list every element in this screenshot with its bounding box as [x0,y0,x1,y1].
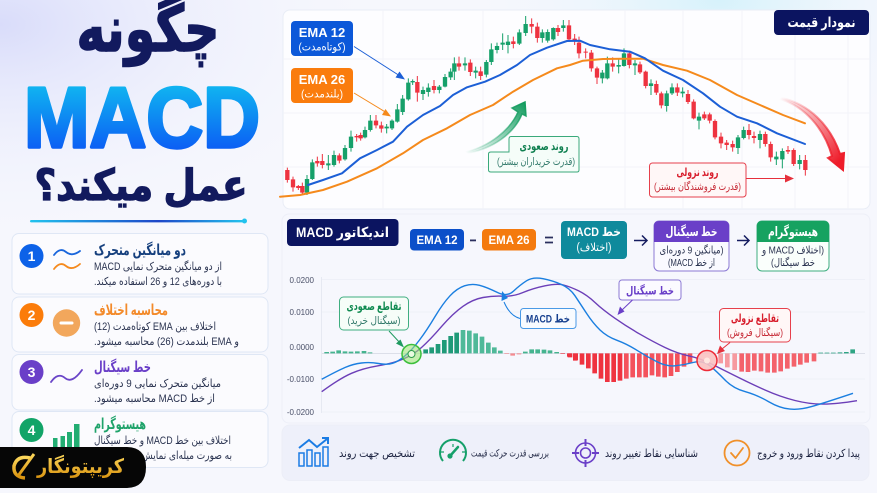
step text [94,377,221,405]
step card 3 [12,354,268,410]
icon: signal line [51,370,82,382]
minus sign [470,240,476,241]
box: MACD line [561,221,627,259]
axis labels: 0.0000 [290,343,315,352]
callout: bullish crossover: (سیگنال خرید) [348,314,400,327]
use: momentum [440,440,549,461]
axis labels: 0.0200 [290,276,315,285]
price label: نمودار قیمت [788,14,856,31]
title [24,0,260,224]
callout: bullish crossover: تقاطع صعودی [346,301,402,314]
arrow: downtrend callout [746,174,794,182]
use: trend change [572,439,698,467]
step text: میانگین متحرک نمایی 9 دوره‌ای [94,377,221,390]
box: MACD line: (اختلاف) [576,242,612,254]
box: histogram: هیستوگرام [768,224,818,240]
arrow: bullish crossover [389,331,404,348]
callout: bearish crossover: (سیگنال فروش) [727,326,783,339]
step text: MACD از دو میانگین متحرک نمایی [94,260,222,273]
heading line: works: عمل میکند؟ [34,162,248,210]
box: signal line: از خط MACD) [668,257,715,269]
line: signal [322,284,857,404]
step card 4 [12,412,268,468]
callout: signal line [619,280,681,300]
step text: از خط MACD محاسبه میشود. [94,393,215,405]
arrow: signal line [618,300,632,315]
step text: به صورت میله‌ای نمایش داده میشود. [94,450,232,462]
box: histogram: خط سیگنال) [771,256,815,269]
callout: uptrend: (قدرت خریداران بیشتر) [497,156,575,168]
chart grid [322,277,865,413]
icon: gauge [440,440,466,461]
box: histogram: (اختلاف MACD و [761,244,824,256]
icon: two waves [54,250,80,269]
box: histogram [757,221,829,271]
arrow: downtrend [780,98,844,170]
chip: EMA 26 [482,229,536,250]
icon: target [572,439,599,467]
step text: و EMA بلندمدت (26) محاسبه میشود. [94,336,239,348]
callout: MACD line [520,308,576,328]
candles: rising section [287,16,579,195]
callout: signal line: خط سیگنال [626,284,674,298]
arrow [634,236,647,246]
badge 3: 3 [28,364,36,380]
box: signal line: خط سیگنال [666,224,718,239]
use: direction [299,438,415,466]
marker: bullish crossover [402,344,421,364]
badge 4: 4 [28,422,36,438]
heading line: MACD: MACD [24,71,260,166]
brand name: کریپتونگار [36,454,124,479]
arrow: MACD line [502,291,520,318]
indicator label: اندیکاتور MACD [296,224,389,241]
icon: minus [53,309,80,337]
badge 4 [20,418,44,442]
callout: downtrend: روند نزولی [676,167,718,180]
step text [94,321,239,348]
icon: rising chart [299,438,328,466]
equals sign [545,238,553,242]
step text: اختلاف بین EMA کوتاه‌مدت (12) [94,321,216,333]
callout: bearish crossover: تقاطع نزولی [731,313,779,326]
axis labels: -0.0100 [287,375,315,384]
badge 1 [20,244,44,268]
callout: downtrend [650,163,746,197]
arrow: bearish crossover [717,342,730,354]
arrow: EMA 26 [354,93,391,116]
step card 2 [12,297,268,352]
callout: uptrend [488,136,579,172]
callout: MACD line: خط MACD [526,314,570,326]
axis labels [287,276,315,417]
badge 2 [20,303,44,327]
box: MACD line: خط MACD [567,225,621,239]
price label [774,10,869,35]
arrow [737,236,749,246]
axis labels: -0.0200 [287,408,315,417]
callout: EMA 12: EMA 12 [299,25,345,40]
icon: histogram bars [53,424,80,452]
line: MACD [322,278,853,409]
step title: هیستوگرام [94,415,146,433]
chip: EMA 12 [410,229,464,250]
callout: EMA 12: (کوتاه‌مدت) [298,42,346,54]
chip: EMA 26: EMA 26 [488,235,530,247]
step title: محاسبه اختلاف [94,302,168,319]
callout: bullish crossover [340,297,408,330]
step text [94,434,232,462]
step text: اختلاف بین خط MACD و خط سیگنال [94,434,231,447]
icon: check [724,440,750,466]
panel: steps [12,234,268,468]
panel: price chart [280,10,870,209]
callout: downtrend: (قدرت فروشندگان بیشتر) [654,180,741,193]
box: signal line: (میانگین 9 دوره‌ای [660,244,724,256]
candles: falling section [586,48,805,176]
step card 1 [12,234,268,294]
callout: EMA 26: (بلندمدت) [301,88,343,100]
step title: دو میانگین متحرک [94,241,186,259]
brand badge [0,447,146,488]
chart grid [283,10,870,209]
badge 2: 2 [28,307,36,323]
step text [94,260,222,288]
arrow: uptrend [466,102,526,153]
icon: brand logo [14,454,34,478]
use: entry and exit [724,440,860,466]
marker: bearish crossover [697,350,717,370]
arrow: EMA 12 [354,46,405,80]
formula [410,221,829,271]
panel: uses [282,425,869,480]
callout: EMA 26: EMA 26 [299,72,345,87]
badge 1: 1 [28,248,36,264]
line: EMA 26 [280,59,805,197]
line: EMA 12 [308,41,805,185]
badge 3 [20,360,44,384]
use: momentum: بررسی قدرت حرکت قیمت [471,448,549,460]
callout: uptrend: روند صعودی [520,141,568,154]
use: direction: تشخیص جهت روند [339,448,415,460]
step text: با دوره‌های 12 و 26 استفاده میکند. [94,276,222,288]
step title: خط سیگنال [94,358,151,376]
panel: MACD [282,214,870,423]
axis labels: 0.0100 [290,308,315,317]
callout: EMA 26 [291,68,353,103]
histogram bars [327,330,853,382]
callout: EMA 12 [291,21,353,56]
indicator label [287,219,398,246]
chip: EMA 12: EMA 12 [416,235,458,247]
callout: bearish crossover [720,308,790,342]
use: trend change: شناسایی نقاط تغییر روند [605,448,698,460]
box: signal line [654,221,729,271]
title underline [30,218,247,224]
